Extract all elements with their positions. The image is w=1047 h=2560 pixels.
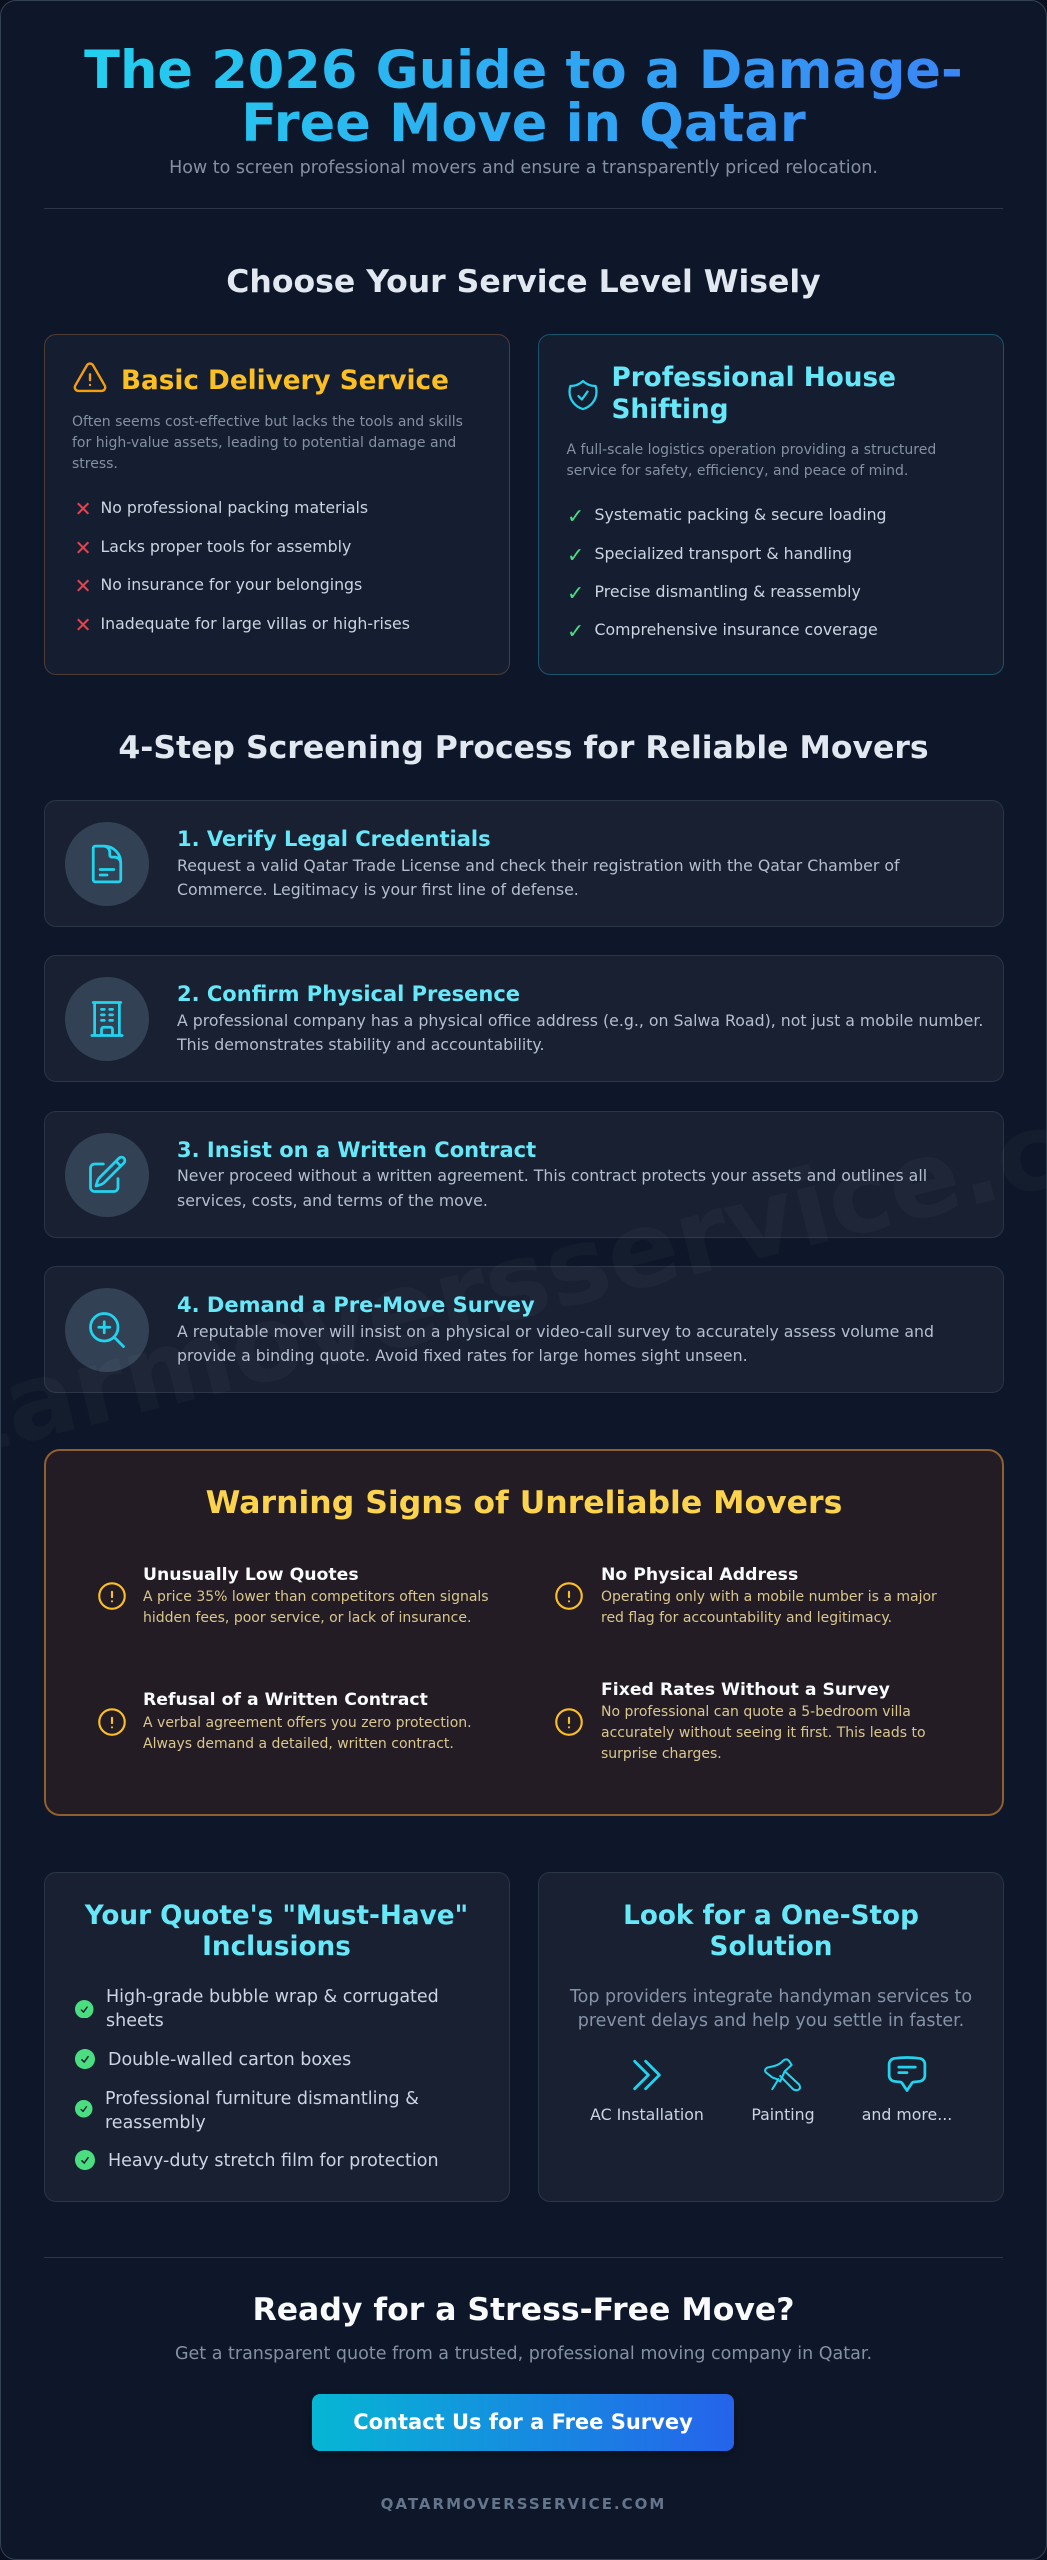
panel: step 3 <box>44 1111 1004 1238</box>
list: missing features: Lacks proper tools for assembly <box>100 537 351 556</box>
panel: one-stop solution <box>538 1872 1004 2202</box>
heading: professional house shifting: Professional House <box>612 363 896 393</box>
footer website: QATARMOVERSSERVICE.COM <box>381 2495 666 2513</box>
list: missing features: ✕ <box>74 612 92 636</box>
icon: tools <box>764 2058 801 2092</box>
description: service for safety, efficiency, and peace of mind. <box>566 462 908 478</box>
button: contact <box>312 2394 734 2451</box>
heading: professional house shifting <box>612 363 896 425</box>
title: Free Move in Qatar <box>241 92 806 154</box>
heading: must-have inclusions <box>84 1900 468 1962</box>
warning item: no contract: Refusal of a Written Contract <box>143 1690 428 1710</box>
step text: Request a valid Qatar Trade License and check their registration with the Qatar Chamber of <box>177 856 900 875</box>
warning item: fixed rates: surprise charges. <box>601 1746 722 1762</box>
list: missing features: ✕ <box>74 574 92 598</box>
title: The 2026 Guide to a Damage- <box>84 40 963 101</box>
warning item: no contract: Always demand a detailed, written contract. <box>143 1736 454 1752</box>
description <box>570 1987 972 2031</box>
checklist: Professional furniture dismantling & <box>105 2089 419 2109</box>
icon: alert circle <box>98 1582 126 1610</box>
list: missing features: Inadequate for large villas or high-rises <box>100 614 410 632</box>
icon: office building <box>65 977 149 1061</box>
description: A full-scale logistics operation providing a structured <box>566 442 936 458</box>
description: prevent delays and help you settle in faster. <box>578 2011 964 2031</box>
panel: warning signs <box>44 1449 1004 1816</box>
heading: one-stop solution: Solution <box>710 1932 832 1962</box>
panel: basic delivery service <box>44 334 510 675</box>
step title: 2. Confirm Physical Presence <box>177 982 520 1006</box>
list: included features: ✓ <box>567 542 584 566</box>
step text: Never proceed without a written agreement. This contract protects your assets and outlines all <box>177 1166 927 1185</box>
warning item: no contract: A verbal agreement offers you zero protection. <box>143 1714 472 1730</box>
list: included features: ✓ <box>567 619 584 643</box>
subtitle: How to screen professional movers and ensure a transparently priced relocation. <box>169 158 878 178</box>
description <box>566 442 936 478</box>
button: contact: Contact Us for a Free Survey <box>353 2410 693 2434</box>
warning item: no address: red flag for accountability and legitimacy. <box>601 1610 892 1626</box>
heading: basic delivery service: Basic Delivery Service <box>121 366 449 396</box>
warning item: no contract <box>98 1690 472 1752</box>
heading: warning signs: Warning Signs of Unreliable Movers <box>206 1485 842 1521</box>
description: stress. <box>72 456 118 472</box>
panel: professional house shifting <box>538 334 1004 675</box>
panel: step 4 <box>44 1266 1004 1393</box>
warning item: low quotes: A price 35% lower than competitors often signals <box>143 1588 489 1604</box>
list: missing features: No professional packing materials <box>100 498 368 517</box>
step text: Commerce. Legitimacy is your first line of defense. <box>177 880 579 899</box>
step title: 3. Insist on a Written Contract <box>177 1138 536 1162</box>
icon: document <box>65 822 149 906</box>
checklist: Double-walled carton boxes <box>108 2050 351 2070</box>
call to action text: Get a transparent quote from a trusted, professional moving company in Qatar. <box>175 2344 872 2364</box>
list: included features <box>567 504 887 643</box>
icon: shield check <box>568 380 598 410</box>
label: and more: and more... <box>862 2105 952 2124</box>
warning item: fixed rates <box>555 1680 926 1762</box>
call to action heading: Ready for a Stress-Free Move? <box>252 2292 795 2328</box>
checklist: reassembly <box>105 2113 206 2133</box>
list: included features: Precise dismantling & reassembly <box>594 582 861 600</box>
panel: step 2 <box>44 955 1004 1082</box>
step text: provide a binding quote. Avoid fixed rates for large homes sight unseen. <box>177 1346 748 1365</box>
description: Often seems cost-effective but lacks the tools and skills <box>72 414 463 430</box>
heading: must-have inclusions: Your Quote's "Must-Have" <box>85 1900 468 1930</box>
label: AC installation: AC Installation <box>590 2105 704 2124</box>
step text <box>176 1011 983 1054</box>
heading: professional house shifting: Shifting <box>612 395 729 425</box>
icon: warning triangle <box>74 362 106 392</box>
heading: screening process: 4-Step Screening Process for Reliable Movers <box>118 730 929 766</box>
heading: service level: Choose Your Service Level Wisely <box>226 264 821 300</box>
warning item: no address: Operating only with a mobile number is a major <box>601 1588 937 1604</box>
list: included features: ✓ <box>567 504 584 528</box>
step text: services, costs, and terms of the move. <box>177 1191 488 1210</box>
warning item: low quotes: Unusually Low Quotes <box>143 1565 359 1585</box>
heading: one-stop solution <box>623 1900 919 1962</box>
step text <box>177 1322 934 1365</box>
step text: A reputable mover will insist on a physical or video-call survey to accurately assess volume and <box>177 1322 934 1341</box>
icon: alert circle <box>98 1708 126 1736</box>
step text: A professional company has a physical office address (e.g., on Salwa Road), not just a mobile number. <box>177 1011 983 1030</box>
list: missing features: ✕ <box>74 536 92 560</box>
warning item: no address: No Physical Address <box>601 1565 798 1585</box>
description: Top providers integrate handyman services to <box>570 1987 972 2007</box>
checklist <box>75 1987 439 2171</box>
icon: alert circle <box>555 1582 583 1610</box>
warning item: fixed rates: Fixed Rates Without a Survey <box>601 1680 890 1700</box>
checklist: High-grade bubble wrap & corrugated <box>106 1987 439 2007</box>
step text <box>177 856 900 899</box>
icon: magnifying glass plus <box>65 1288 149 1372</box>
description: for high-value assets, leading to potential damage and <box>72 434 456 450</box>
list: included features: Specialized transport & handling <box>594 544 852 562</box>
checklist: Heavy-duty stretch film for protection <box>108 2151 439 2171</box>
panel: step 1 <box>44 800 1004 927</box>
warning item: fixed rates: accurately without seeing it first. This leads to <box>601 1724 926 1740</box>
label: painting: Painting <box>751 2105 815 2124</box>
warning item: no address <box>555 1565 937 1626</box>
list: missing features: No insurance for your belongings <box>100 575 362 594</box>
step title: 1. Verify Legal Credentials <box>177 827 491 851</box>
list: missing features: ✕ <box>74 497 92 521</box>
icon: pencil square <box>65 1133 149 1217</box>
step text <box>177 1166 927 1210</box>
warning item: low quotes: hidden fees, poor service, or lack of insurance. <box>143 1610 471 1626</box>
warning item: fixed rates: No professional can quote a 5-bedroom villa <box>601 1704 911 1720</box>
step text: This demonstrates stability and accountability. <box>177 1035 545 1054</box>
icon: chevrons <box>633 2060 661 2090</box>
warning item: low quotes <box>98 1565 489 1626</box>
list: included features: Systematic packing & secure loading <box>594 504 887 524</box>
checklist: sheets <box>106 2011 164 2031</box>
panel: must-have inclusions <box>44 1872 510 2202</box>
step title: 4. Demand a Pre-Move Survey <box>177 1293 535 1317</box>
list: included features: ✓ <box>567 580 584 604</box>
icon: alert circle <box>555 1708 583 1736</box>
title <box>44 45 1003 150</box>
icon: chat bubble <box>888 2056 926 2092</box>
list: missing features <box>74 497 410 636</box>
description <box>72 414 463 472</box>
list: included features: Comprehensive insurance coverage <box>594 620 878 639</box>
heading: one-stop solution: Look for a One-Stop <box>623 1900 919 1930</box>
heading: must-have inclusions: Inclusions <box>202 1932 351 1962</box>
